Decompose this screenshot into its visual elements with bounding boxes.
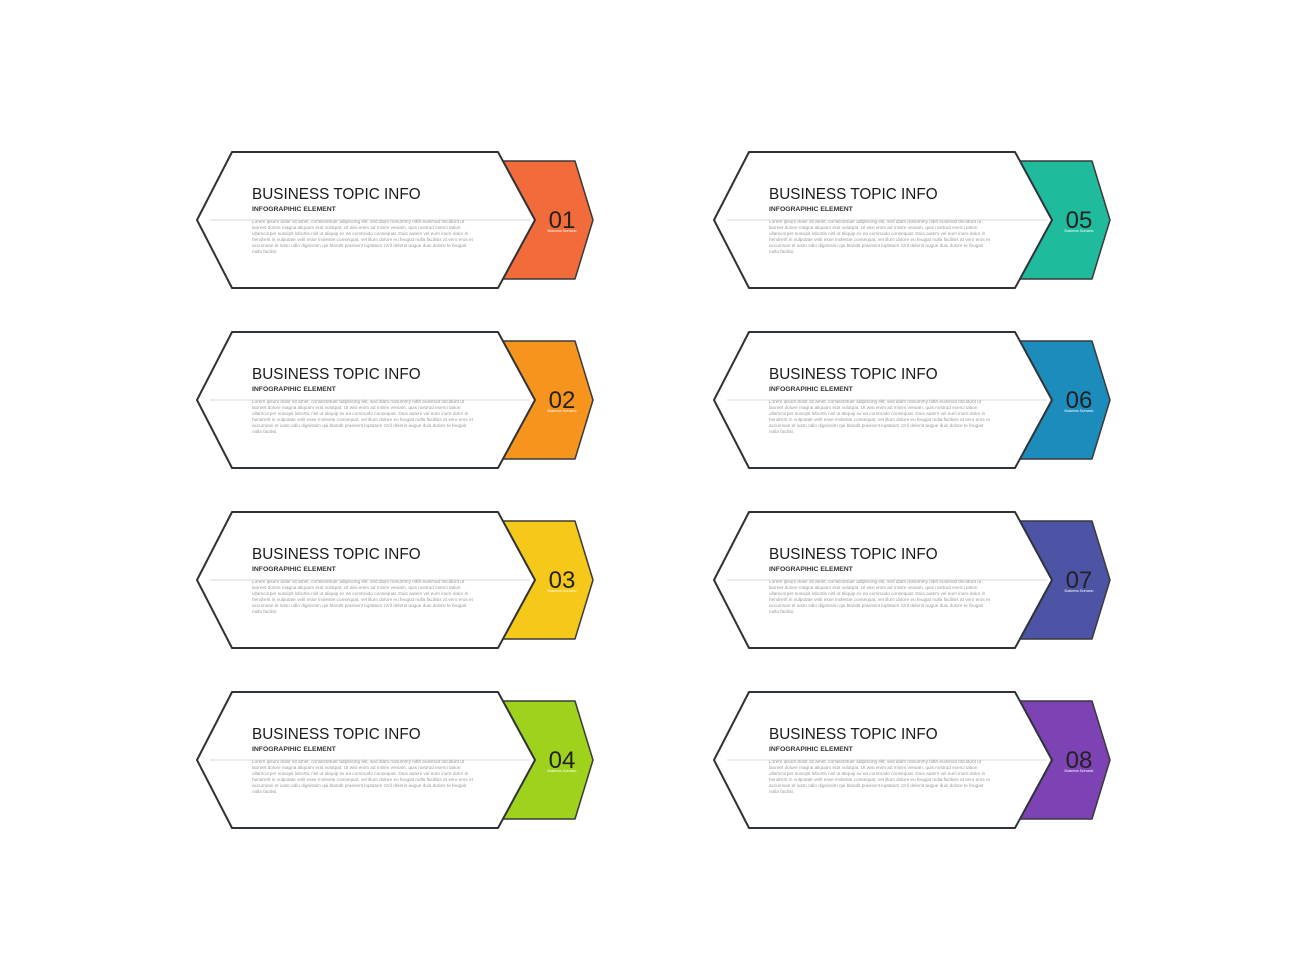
arrow: 01 (470, 161, 593, 279)
arrow: 03 (470, 521, 593, 639)
arrow: 08 (987, 701, 1110, 819)
panel: 04 (197, 692, 535, 828)
panel: 01 (197, 152, 535, 288)
item 05 (714, 152, 1110, 288)
number 07: 07 (1066, 567, 1092, 594)
item 04 (197, 692, 593, 828)
arrow: 05 (987, 161, 1110, 279)
number 07: Business Scenario (1064, 589, 1094, 593)
arrow: 07 (987, 521, 1110, 639)
panel: 06 (714, 332, 1052, 468)
number 08: Business Scenario (1064, 769, 1094, 773)
item 07 (714, 512, 1110, 648)
item 06 (714, 332, 1110, 468)
number 02: 02 (549, 387, 575, 414)
number 04: 04 (549, 747, 575, 774)
number 05: Business Scenario (1064, 229, 1094, 233)
number 02: Business Scenario (548, 409, 577, 413)
number 01: 01 (549, 207, 575, 234)
panel: 02 (197, 332, 535, 468)
arrow: 04 (470, 701, 593, 819)
number 05: 05 (1066, 207, 1092, 234)
number 06: 06 (1066, 387, 1092, 414)
number 08: 08 (1066, 747, 1092, 774)
number 03: Business Scenario (548, 589, 577, 593)
number 03: 03 (549, 567, 575, 594)
panel: 08 (714, 692, 1052, 828)
number 04: Business Scenario (548, 769, 577, 773)
number 01: Business Scenario (548, 229, 577, 233)
panel: 03 (197, 512, 535, 648)
item 01 (197, 152, 593, 288)
panel: 05 (714, 152, 1052, 288)
panel: 07 (714, 512, 1052, 648)
arrow: 02 (470, 341, 593, 459)
item 08 (714, 692, 1110, 828)
item 02 (197, 332, 593, 468)
number 06: Business Scenario (1064, 409, 1094, 413)
item 03 (197, 512, 593, 648)
arrow: 06 (987, 341, 1110, 459)
